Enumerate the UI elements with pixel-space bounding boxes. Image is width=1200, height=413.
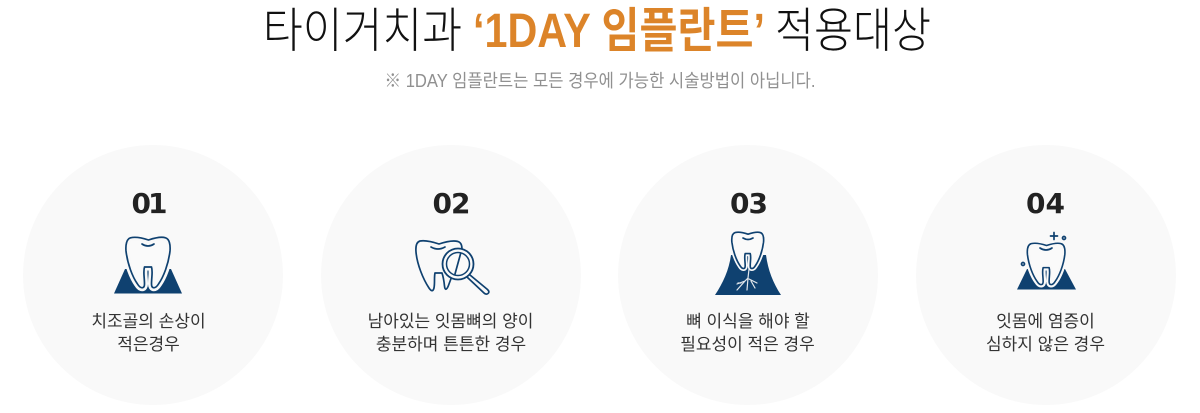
number 01: 01 [132, 187, 166, 220]
number 02: 02 [433, 187, 469, 220]
panel: case 03 [618, 145, 878, 405]
caption 04: 잇몸에 염증이 [996, 312, 1095, 331]
caption 02: 남아있는 잇몸뼈의 양이 [368, 312, 533, 331]
icon: tooth with magnifier [416, 241, 489, 294]
caption 01: 적은경우 [117, 335, 180, 354]
title: 타이거치과 [263, 5, 462, 58]
title: ‘1DAY 임플란트’ [473, 5, 765, 58]
panel: case 02 [321, 145, 581, 405]
caption 04: 심하지 않은 경우 [986, 335, 1105, 354]
number 03: 03 [730, 187, 767, 220]
caption 01: 치조골의 손상이 [91, 312, 206, 331]
icon: magnifier [442, 248, 489, 294]
number 04: 04 [1026, 187, 1065, 220]
title [263, 5, 931, 58]
caption 03: 뼈 이식을 해야 할 [686, 312, 810, 331]
title: 적용대상 [775, 5, 931, 58]
subtitle note: ※ 1DAY 임플란트는 모든 경우에 가능한 시술방법이 아닙니다. [384, 71, 816, 91]
icon: tooth with reduced gum [114, 237, 182, 294]
panel: case 01 [23, 145, 283, 405]
caption 03: 필요성이 적은 경우 [680, 335, 815, 354]
icon: tooth above bone [715, 232, 781, 295]
icon: healthy tooth with sparkle [1017, 232, 1076, 290]
panel: case 04 [916, 145, 1176, 405]
caption 02: 충분하며 튼튼한 경우 [376, 335, 526, 354]
